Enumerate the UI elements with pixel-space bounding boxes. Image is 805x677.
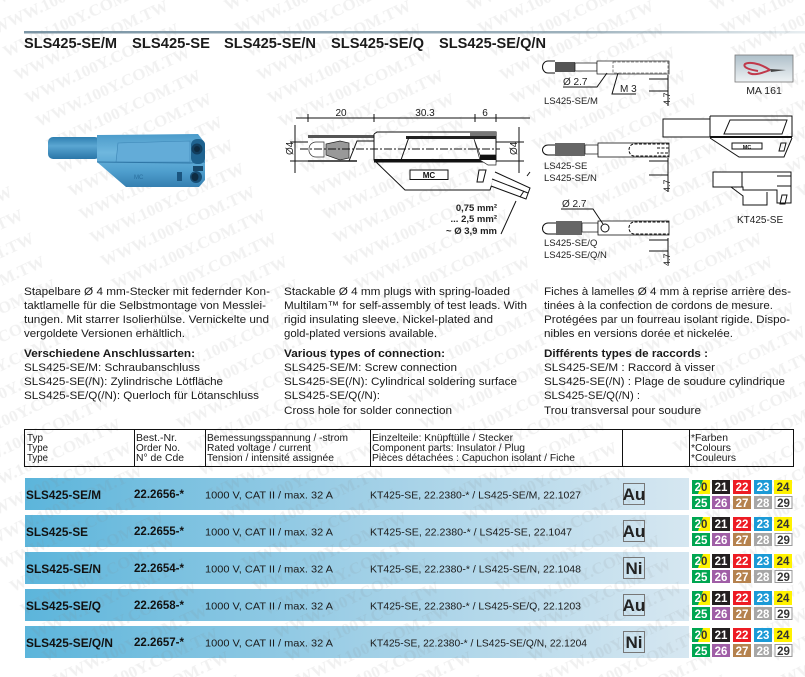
table row: SLS425-SE/M: 24 bbox=[777, 482, 790, 494]
table row: SLS425-SE/Q: 28 bbox=[757, 609, 770, 621]
text block: English description: SLS425-SE/M: Screw connection bbox=[284, 362, 457, 374]
title: model list: SLS425-SE bbox=[132, 36, 210, 52]
table row: SLS425-SE/Q/N: 28 bbox=[757, 646, 770, 658]
technical drawing: complete plug with dimensions: ~ Ø 3,9 mm bbox=[446, 226, 497, 237]
table row: SLS425-SE/N: 23 bbox=[757, 556, 769, 568]
table row: SLS425-SE/N: 25 bbox=[695, 572, 708, 584]
table row: SLS425-SE/Q/N: 22.2657-* bbox=[134, 637, 185, 649]
title: model list: SLS425-SE/N bbox=[224, 36, 316, 52]
text block: German description: tungen. Mit starrer Isolierhülse. Vernickelte und bbox=[24, 314, 269, 326]
text block: German description: vergoldete Versionen erhältlich. bbox=[24, 328, 185, 340]
text block: German description: SLS425-SE/M: Schraubanschluss bbox=[24, 362, 201, 374]
table row: SLS425-SE: Au bbox=[623, 522, 645, 541]
table row: SLS425-SE/M: 26 bbox=[715, 498, 727, 510]
text block: English description bbox=[284, 286, 527, 417]
table header: Type bbox=[27, 452, 48, 464]
table row: SLS425-SE/Q: 29 bbox=[777, 609, 790, 621]
table row: SLS425-SE/Q/N: 21 bbox=[715, 630, 728, 642]
table row: SLS425-SE/N: Ni bbox=[626, 559, 642, 578]
table row: SLS425-SE/N: SLS425-SE/N bbox=[26, 562, 101, 576]
technical drawing: complete plug with dimensions: Ø4 bbox=[285, 141, 296, 155]
text block: German description: SLS425-SE/Q(/N): Querloch für Lötanschluss bbox=[24, 390, 260, 402]
table header: N° de Cde bbox=[136, 452, 184, 464]
table row: SLS425-SE/M: KT425-SE, 22.2380-* / LS425-SE/M, 22.1027 bbox=[370, 490, 581, 502]
text block: German description: Stapelbare Ø 4 mm-Stecker mit federnder Kon- bbox=[24, 286, 270, 298]
table row: SLS425-SE/Q bbox=[26, 591, 792, 621]
table header: Rated voltage / current bbox=[207, 442, 311, 454]
title: model list: SLS425-SE/Q bbox=[331, 36, 424, 52]
table row: SLS425-SE/Q: 1000 V, CAT II / max. 32 A bbox=[205, 600, 333, 612]
text block: English description: gold-plated versions available. bbox=[284, 328, 437, 340]
table header: Best.-Nr. bbox=[136, 432, 177, 444]
title: model list: SLS425-SE/M bbox=[24, 36, 117, 52]
table row: SLS425-SE/N bbox=[26, 554, 792, 584]
table row: SLS425-SE/Q/N: 22 bbox=[736, 630, 748, 642]
table row: SLS425-SE/N: KT425-SE, 22.2380-* / LS425-SE/N, 22.1048 bbox=[370, 564, 581, 576]
text block: English description: Cross hole for solder connection bbox=[284, 405, 452, 417]
photo: blue plug: MC bbox=[134, 175, 144, 181]
diagram: LS425-SE/M contact bbox=[542, 61, 672, 107]
table row: SLS425-SE: SLS425-SE bbox=[26, 525, 88, 539]
table row: SLS425-SE/M: 21 bbox=[715, 482, 728, 494]
table row: SLS425-SE/Q/N: 29 bbox=[777, 646, 790, 658]
table row: SLS425-SE: 24 bbox=[777, 519, 790, 531]
table row: SLS425-SE/M: 25 bbox=[695, 498, 708, 510]
table row: SLS425-SE/N: 21 bbox=[715, 556, 728, 568]
table row: SLS425-SE/Q/N: 20 bbox=[695, 630, 707, 642]
table row: SLS425-SE/Q: Au bbox=[623, 596, 645, 615]
text block: French description: Fiches à lamelles Ø 4 mm à reprise arrière des- bbox=[544, 286, 791, 298]
table header: Einzelteile: Knüpftülle / Stecker bbox=[372, 432, 513, 444]
table row: SLS425-SE/N: 27 bbox=[736, 572, 748, 584]
header rule bbox=[24, 31, 805, 34]
text block: German description: taktlamelle für die Selbstmontage von Messlei- bbox=[24, 300, 266, 312]
text block: English description: Various types of connection: bbox=[284, 348, 445, 360]
product rows background bands bbox=[25, 478, 689, 658]
table header: Type bbox=[27, 442, 48, 454]
text block: French description: Trou transversal pour soudure bbox=[544, 405, 701, 417]
table row: SLS425-SE/Q/N: 24 bbox=[777, 630, 790, 642]
technical drawing: complete plug with dimensions: MC bbox=[423, 171, 435, 180]
table row: SLS425-SE/M: 29 bbox=[777, 498, 790, 510]
diagram: KT425-SE insulator: KT425-SE bbox=[737, 215, 783, 226]
diagram: LS425-SE contact: LS425-SE/N bbox=[544, 173, 597, 184]
table row: SLS425-SE: KT425-SE, 22.2380-* / LS425-SE, 22.1047 bbox=[370, 526, 572, 538]
text block: French description: SLS425-SE/M : Raccord à visser bbox=[544, 362, 715, 374]
table row: SLS425-SE/N: 22 bbox=[736, 556, 748, 568]
title: model list bbox=[24, 36, 546, 52]
table row: SLS425-SE/M: 23 bbox=[757, 482, 769, 494]
table row: SLS425-SE/Q: 22 bbox=[736, 593, 748, 605]
table row: SLS425-SE/Q/N: 1000 V, CAT II / max. 32 A bbox=[205, 638, 333, 650]
table header: *Farben bbox=[691, 432, 728, 444]
text block: German description: Verschiedene Anschlussarten: bbox=[24, 348, 195, 360]
text block: English description: SLS425-SE(/N): Cylindrical soldering surface bbox=[284, 376, 517, 388]
table row: SLS425-SE/Q: 21 bbox=[715, 593, 728, 605]
table row: SLS425-SE/Q: KT425-SE, 22.2380-* / LS425-SE/Q, 22.1203 bbox=[370, 600, 581, 612]
text block: English description: SLS425-SE/Q(/N): bbox=[284, 390, 380, 402]
table row: SLS425-SE/Q: 26 bbox=[715, 609, 727, 621]
table row: SLS425-SE/M: 1000 V, CAT II / max. 32 A bbox=[205, 490, 333, 502]
table header: *Couleurs bbox=[691, 452, 736, 464]
table row: SLS425-SE/Q/N: 25 bbox=[695, 646, 708, 658]
diagram: LS425-SE/Q contact: LS425-SE/Q/N bbox=[544, 250, 607, 261]
table row: SLS425-SE: 25 bbox=[695, 535, 708, 547]
table row: SLS425-SE: 22 bbox=[736, 519, 748, 531]
table header bbox=[24, 429, 794, 467]
text block: French description bbox=[544, 286, 791, 417]
diagram: LS425-SE contact: LS425-SE bbox=[544, 161, 587, 172]
table row: SLS425-SE/M: 28 bbox=[757, 498, 770, 510]
table row: SLS425-SE/N: 26 bbox=[715, 572, 727, 584]
table row: SLS425-SE/M: 22 bbox=[736, 482, 748, 494]
table row: SLS425-SE/Q/N: KT425-SE, 22.2380-* / LS425-SE/Q/N, 22.1204 bbox=[370, 638, 587, 650]
table header: Bemessungsspannung / -strom bbox=[207, 432, 348, 444]
diagram: insulating sleeve bbox=[663, 116, 792, 157]
diagram: LS425-SE/M contact: 4.7 bbox=[662, 92, 672, 105]
table header: Order No. bbox=[136, 442, 180, 454]
table row: SLS425-SE/Q: 23 bbox=[757, 593, 769, 605]
technical drawing: complete plug with dimensions bbox=[285, 108, 530, 237]
text block: English description: Stackable Ø 4 mm plugs with spring-loaded bbox=[284, 286, 510, 298]
technical drawing: complete plug with dimensions: ... 2,5 mm² bbox=[451, 214, 497, 225]
text block: French description: SLS425-SE(/N) : Plage de soudure cylindrique bbox=[544, 376, 785, 388]
technical drawing: complete plug with dimensions: 20 bbox=[335, 108, 347, 119]
diagram: LS425-SE/Q contact: LS425-SE/Q bbox=[544, 238, 597, 249]
diagram: insulating sleeve: MC bbox=[743, 145, 751, 151]
photo: blue plug bbox=[48, 134, 205, 187]
diagram: LS425-SE/Q contact: 4.7 bbox=[662, 253, 672, 266]
diagram: LS425-SE contact: 4.7 bbox=[662, 179, 672, 192]
diagram: LS425-SE/M contact: LS425-SE/M bbox=[544, 96, 598, 107]
table row: SLS425-SE/Q: 27 bbox=[736, 609, 748, 621]
text block: French description: SLS425-SE/Q(/N) : bbox=[544, 390, 640, 402]
table row: SLS425-SE: 1000 V, CAT II / max. 32 A bbox=[205, 526, 333, 538]
text block: German description: SLS425-SE(/N): Zylindrische Lötfläche bbox=[24, 376, 223, 388]
table row: SLS425-SE/Q/N: Ni bbox=[626, 633, 642, 652]
table row: SLS425-SE/N: 28 bbox=[757, 572, 770, 584]
technical drawing: complete plug with dimensions: 6 bbox=[482, 108, 488, 119]
table row: SLS425-SE/Q/N: 27 bbox=[736, 646, 748, 658]
diagram: LS425-SE/Q contact: Ø 2.7 bbox=[562, 199, 587, 210]
table row: SLS425-SE/N: 20 bbox=[695, 556, 707, 568]
table row: SLS425-SE bbox=[26, 517, 792, 547]
table row: SLS425-SE/M: SLS425-SE/M bbox=[26, 488, 101, 502]
table header: Component parts: Insulator / Plug bbox=[372, 442, 525, 454]
table row: SLS425-SE/Q/N bbox=[26, 628, 792, 658]
text block: English description: Multilam™ for self-assembly of test leads. With bbox=[284, 300, 527, 312]
table header: Tension / intensité assignée bbox=[207, 452, 334, 464]
title: model list: SLS425-SE/Q/N bbox=[439, 36, 546, 52]
table row: SLS425-SE: 28 bbox=[757, 535, 770, 547]
icon: MA 161 crimping pliers bbox=[735, 55, 793, 97]
icon: MA 161 crimping pliers: MA 161 bbox=[746, 85, 782, 97]
technical drawing: complete plug with dimensions: 30.3 bbox=[415, 108, 435, 119]
table row: SLS425-SE/M: 22.2656-* bbox=[134, 489, 185, 501]
table row: SLS425-SE: 26 bbox=[715, 535, 727, 547]
diagram: LS425-SE/M contact: M 3 bbox=[620, 84, 637, 95]
diagram: LS425-SE contact bbox=[542, 143, 672, 192]
technical drawing: complete plug with dimensions: Ø4 bbox=[509, 141, 520, 155]
table row: SLS425-SE/N: 22.2654-* bbox=[134, 563, 185, 575]
table row: SLS425-SE/N: 29 bbox=[777, 572, 790, 584]
text block: French description: nibles en versions dorée et nickelée. bbox=[544, 328, 733, 340]
table row: SLS425-SE/M: Au bbox=[623, 485, 645, 504]
table row: SLS425-SE/M: 27 bbox=[736, 498, 748, 510]
table header: Typ bbox=[27, 432, 43, 444]
table row: SLS425-SE/N: 1000 V, CAT II / max. 32 A bbox=[205, 564, 333, 576]
text block: French description: Différents types de raccords : bbox=[544, 348, 708, 360]
table row: SLS425-SE: 23 bbox=[757, 519, 769, 531]
diagram: LS425-SE/M contact: Ø 2.7 bbox=[563, 77, 588, 88]
diagram: LS425-SE/Q contact bbox=[542, 199, 672, 266]
table row: SLS425-SE/M: 20 bbox=[695, 482, 707, 494]
table row: SLS425-SE/Q: 20 bbox=[695, 593, 707, 605]
table row: SLS425-SE/N: 24 bbox=[777, 556, 790, 568]
table row: SLS425-SE/Q: SLS425-SE/Q bbox=[26, 599, 101, 613]
table row: SLS425-SE/Q: 25 bbox=[695, 609, 708, 621]
technical drawing: complete plug with dimensions: 0,75 mm² bbox=[456, 203, 497, 214]
table row: SLS425-SE: 21 bbox=[715, 519, 728, 531]
table row: SLS425-SE: 29 bbox=[777, 535, 790, 547]
table row: SLS425-SE/Q: 24 bbox=[777, 593, 790, 605]
text block: French description: Protégées par un fourreau isolant rigide. Dispo- bbox=[544, 314, 790, 326]
text block: French description: tinées à la confection de cordons de mesure. bbox=[544, 300, 773, 312]
text block: German description bbox=[24, 286, 270, 402]
table row: SLS425-SE: 27 bbox=[736, 535, 748, 547]
table row: SLS425-SE/Q/N: 26 bbox=[715, 646, 727, 658]
diagram: KT425-SE insulator bbox=[713, 172, 791, 226]
table row: SLS425-SE/M bbox=[26, 480, 792, 510]
table row: SLS425-SE: 22.2655-* bbox=[134, 526, 185, 538]
table row: SLS425-SE: 20 bbox=[695, 519, 707, 531]
table row: SLS425-SE/Q: 22.2658-* bbox=[134, 600, 185, 612]
table header: *Colours bbox=[691, 442, 731, 454]
table row: SLS425-SE/Q/N: SLS425-SE/Q/N bbox=[26, 636, 113, 650]
table header: Pièces détachées : Capuchon isolant / Fiche bbox=[372, 452, 575, 464]
table row: SLS425-SE/Q/N: 23 bbox=[757, 630, 769, 642]
text block: English description: rigid insulating sleeve. Nickel-plated and bbox=[284, 314, 493, 326]
